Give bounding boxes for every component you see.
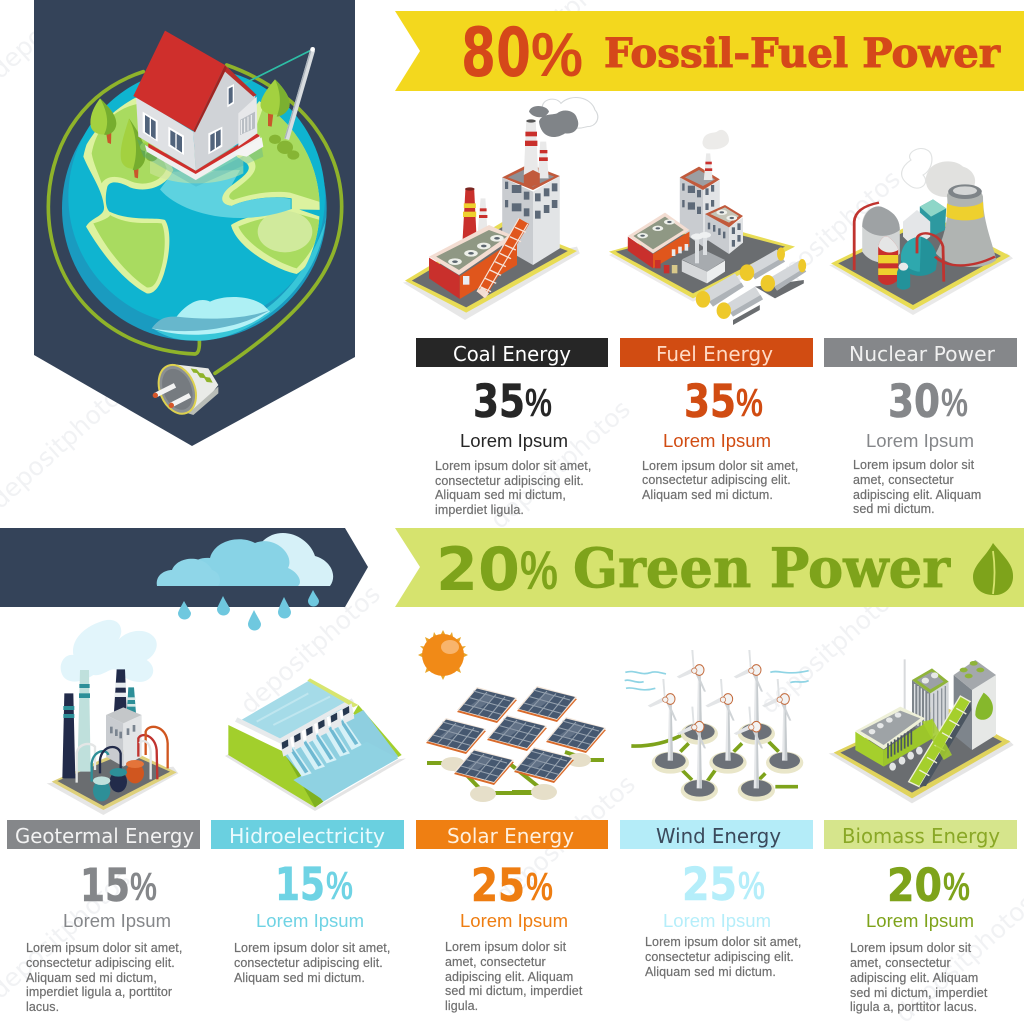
windows bbox=[505, 182, 557, 219]
percent: % bbox=[943, 865, 970, 909]
description: lacus. bbox=[26, 1000, 59, 1014]
description: Aliquam sed mi dictum. bbox=[642, 488, 773, 502]
bases bbox=[441, 753, 591, 802]
subtitle: Lorem Ipsum bbox=[63, 911, 171, 931]
description: consectetur adipiscing elit. bbox=[645, 950, 794, 964]
label bar bbox=[620, 338, 813, 367]
cooling tower bbox=[936, 186, 996, 267]
watermarks: depositphotos bbox=[485, 394, 636, 534]
cables bbox=[427, 752, 604, 793]
house bbox=[133, 31, 263, 187]
description: adipiscing elit. Aliquam bbox=[445, 970, 573, 984]
heading percent bbox=[436, 535, 558, 605]
process units bbox=[682, 260, 707, 283]
tree bbox=[90, 98, 116, 144]
description: imperdiet ligula. bbox=[435, 503, 524, 517]
percent: 25 bbox=[682, 858, 737, 911]
description: adipiscing elit. Aliquam bbox=[850, 971, 978, 985]
description: sed mi dictum, imperdiet bbox=[445, 984, 583, 998]
description: amet, consectetur bbox=[850, 956, 951, 970]
percent: % bbox=[736, 381, 763, 425]
percent: 35 bbox=[473, 375, 525, 428]
description: consectetur adipiscing elit. bbox=[26, 956, 175, 970]
label bar: Solar Energy bbox=[447, 824, 574, 848]
heading percent: 20 bbox=[436, 535, 520, 605]
description: consectetur adipiscing elit. bbox=[234, 956, 383, 970]
percent: 15 bbox=[80, 859, 130, 912]
label bar: Wind Energy bbox=[656, 824, 781, 848]
description: Lorem ipsum dolor sit amet, bbox=[645, 935, 801, 949]
description: Lorem ipsum dolor sit bbox=[850, 941, 972, 955]
conveyor bbox=[909, 696, 970, 787]
description: Aliquam sed mi dictum, bbox=[435, 488, 566, 502]
wind farm bbox=[625, 650, 809, 801]
block right bbox=[954, 675, 972, 750]
land highlights bbox=[258, 211, 312, 252]
geothermal plant bbox=[47, 620, 178, 815]
percent: % bbox=[738, 864, 765, 908]
description: adipiscing elit. Aliquam bbox=[853, 488, 981, 502]
heading percent: 80 bbox=[461, 14, 531, 93]
hall bbox=[855, 732, 884, 767]
description bbox=[645, 935, 801, 979]
description: amet, consectetur bbox=[853, 473, 954, 487]
column: nuclear power bbox=[824, 338, 1017, 516]
chimneys bbox=[524, 122, 538, 175]
label bar: Biomass Energy bbox=[842, 824, 1000, 848]
watermarks: depositphotos bbox=[490, 769, 641, 909]
arrow banner with clouds bbox=[0, 528, 368, 630]
description: sed mi dictum. bbox=[853, 502, 935, 516]
percent: 15 bbox=[275, 858, 325, 911]
label bar bbox=[211, 820, 404, 849]
tree bbox=[261, 79, 290, 127]
icon: sun bbox=[418, 630, 468, 680]
heading title: Green Power bbox=[573, 536, 951, 600]
percent: 35 bbox=[684, 375, 736, 428]
description: Lorem ipsum dolor sit bbox=[445, 940, 567, 954]
heading title: Fossil-Fuel Power bbox=[604, 30, 1001, 77]
description: Lorem ipsum dolor sit bbox=[853, 458, 975, 472]
panel: navy pennant with earth bbox=[34, 0, 355, 446]
description: consectetur adipiscing elit. bbox=[642, 473, 791, 487]
description: Lorem ipsum dolor sit amet, bbox=[26, 941, 182, 955]
subtitle: Lorem Ipsum bbox=[460, 911, 568, 931]
subtitle: Lorem Ipsum bbox=[663, 431, 771, 451]
ice cap bbox=[155, 297, 270, 330]
red building bbox=[429, 258, 460, 299]
bushes bbox=[140, 135, 299, 161]
description: Lorem ipsum dolor sit amet, bbox=[234, 941, 390, 955]
description: ligula. bbox=[445, 999, 478, 1013]
percent: % bbox=[525, 381, 552, 425]
banner: 80% fossil-fuel power bbox=[395, 11, 1024, 93]
label bar: Fuel Energy bbox=[656, 342, 773, 366]
domes bbox=[901, 237, 937, 276]
power cord ring bbox=[48, 65, 342, 373]
illustration: earth with house and plug bbox=[48, 31, 342, 419]
label bar: Geotermal Energy bbox=[15, 824, 194, 848]
description: imperdiet ligula a, porttitor bbox=[26, 985, 172, 999]
label bar: Hidroelectricity bbox=[229, 824, 385, 848]
description: Aliquam sed mi dictum. bbox=[234, 971, 365, 985]
label bar bbox=[416, 338, 608, 367]
smoke bbox=[702, 130, 729, 149]
red chimney bbox=[462, 189, 477, 247]
coal plant bbox=[403, 98, 598, 320]
description bbox=[853, 458, 981, 516]
nuclear plant bbox=[829, 148, 1013, 315]
description bbox=[642, 459, 798, 502]
fuel tanks bbox=[696, 247, 806, 325]
block left bbox=[912, 680, 930, 738]
description: Aliquam sed mi dictum. bbox=[645, 965, 776, 979]
banner: 20% green power bbox=[395, 528, 1024, 607]
label bar bbox=[620, 820, 813, 849]
description bbox=[26, 941, 182, 1014]
tree bbox=[121, 118, 145, 178]
smoke bbox=[529, 98, 598, 137]
column: solar energy bbox=[416, 820, 608, 1013]
antenna pole bbox=[243, 47, 315, 139]
description bbox=[234, 941, 390, 985]
fuel plant bbox=[609, 130, 806, 325]
illustrations: green plants left bbox=[47, 620, 406, 815]
annex bbox=[920, 199, 946, 237]
description bbox=[445, 940, 583, 1013]
solar panels bbox=[426, 686, 606, 785]
description bbox=[850, 941, 988, 1014]
percent: 20 bbox=[887, 859, 942, 912]
cables bbox=[631, 735, 798, 787]
column: biomass energy bbox=[824, 820, 1017, 1014]
barrels bbox=[889, 747, 923, 771]
description: ligula a, porttitor lacus. bbox=[850, 1000, 977, 1014]
column: geothermal energy bbox=[7, 820, 200, 1014]
shallow water under house bbox=[160, 170, 291, 218]
watermarks: depositphotos bbox=[235, 579, 386, 719]
red hall bbox=[628, 237, 653, 268]
percent: 25 bbox=[471, 859, 525, 912]
silo bbox=[862, 206, 900, 263]
hydro dam bbox=[225, 678, 406, 811]
icon: leaf bbox=[973, 543, 1013, 595]
turbines bbox=[677, 650, 718, 745]
percent: % bbox=[941, 381, 968, 425]
heading percent: % bbox=[520, 539, 558, 601]
subtitle: Lorem Ipsum bbox=[460, 431, 568, 451]
label bar bbox=[824, 338, 1017, 367]
description: Aliquam sed mi dictum, bbox=[26, 971, 157, 985]
description bbox=[435, 459, 591, 517]
wind lines bbox=[625, 671, 809, 690]
biomass plant bbox=[829, 659, 1014, 803]
subtitle: Lorem Ipsum bbox=[866, 431, 974, 451]
heading percent: % bbox=[531, 21, 583, 90]
label bar bbox=[824, 820, 1017, 849]
label bar bbox=[416, 820, 608, 849]
column: fuel energy bbox=[620, 338, 813, 502]
percent: % bbox=[326, 864, 353, 908]
subtitle: Lorem Ipsum bbox=[256, 911, 364, 931]
description: Lorem ipsum dolor sit amet, bbox=[642, 459, 798, 473]
pipes bbox=[854, 203, 995, 282]
tall building bbox=[680, 177, 703, 247]
plug bbox=[152, 359, 218, 419]
steam bbox=[902, 148, 932, 188]
percent: 30 bbox=[888, 375, 940, 428]
conveyor bbox=[477, 218, 529, 298]
subtitle: Lorem Ipsum bbox=[866, 911, 974, 931]
watermarks: depositphotos bbox=[235, 162, 386, 302]
icon: rain clouds bbox=[157, 533, 333, 630]
watermarks: depositphotos bbox=[755, 164, 906, 304]
description: Lorem ipsum dolor sit amet, bbox=[435, 459, 591, 473]
description: sed mi dictum, imperdiet bbox=[850, 986, 988, 1000]
percent: % bbox=[526, 865, 553, 909]
percent: % bbox=[130, 865, 157, 909]
second building bbox=[705, 214, 729, 254]
watermarks: depositphotos bbox=[755, 579, 906, 719]
description: consectetur adipiscing elit. bbox=[435, 474, 584, 488]
illustrations: solar farm bbox=[418, 630, 606, 802]
globe bbox=[62, 68, 327, 341]
illustrations: wind and biomass bbox=[625, 650, 1014, 803]
label bar: Nuclear Power bbox=[849, 342, 996, 366]
tower bbox=[502, 177, 533, 265]
illustrations: fossil plants bbox=[403, 98, 1013, 325]
land continents bbox=[83, 97, 327, 293]
description: amet, consectetur bbox=[445, 955, 546, 969]
column: hydroelectricity bbox=[211, 820, 404, 985]
label bar: Coal Energy bbox=[453, 342, 571, 366]
column: wind energy bbox=[620, 820, 813, 979]
column: coal energy bbox=[416, 338, 608, 517]
subtitle: Lorem Ipsum bbox=[663, 911, 771, 931]
